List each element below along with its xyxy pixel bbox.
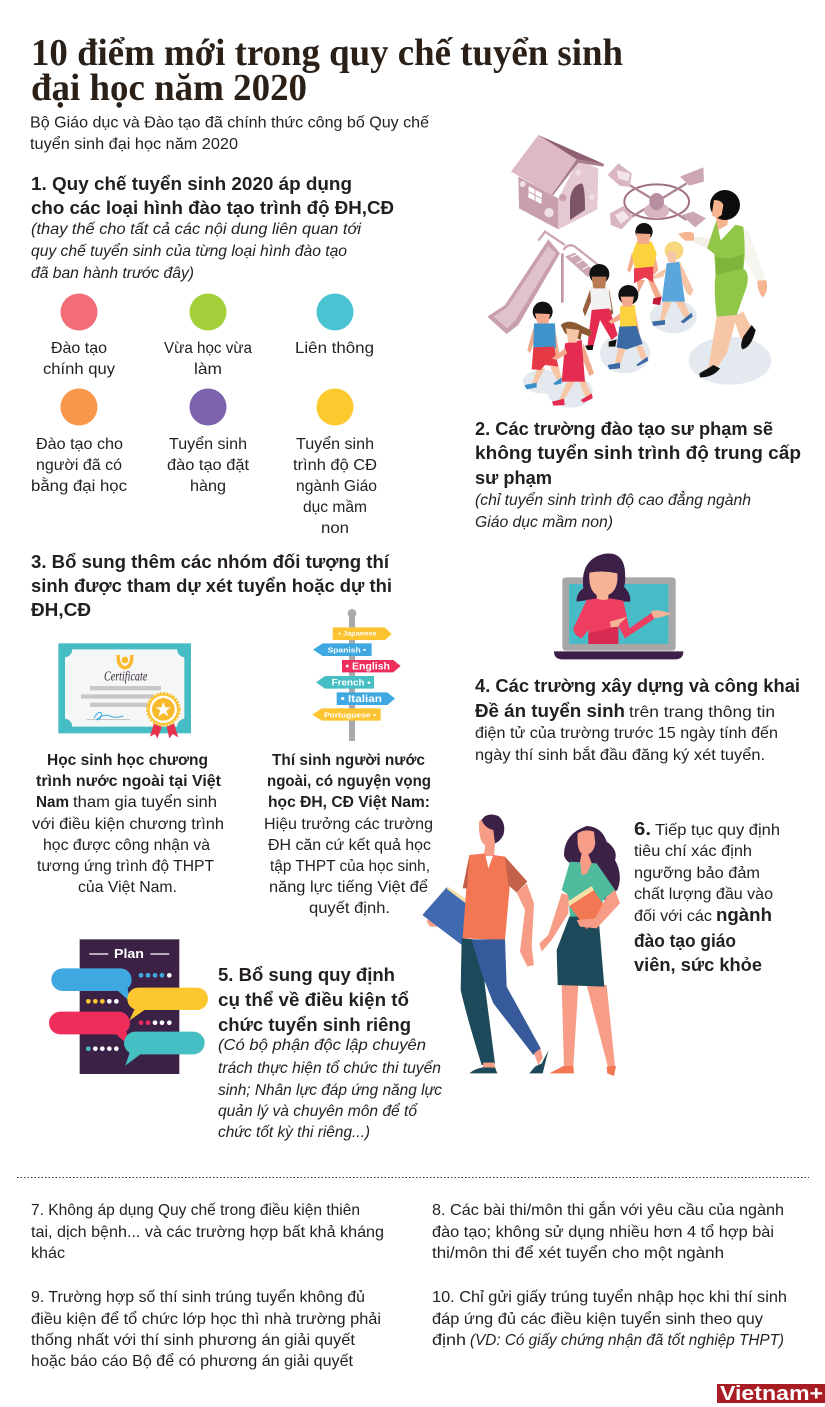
icon: language signpost: French • (332, 677, 371, 687)
text: foreign candidates: Hiệu trưởng các trường (264, 816, 433, 833)
text: foreign programme students: trình nước ngoài tại Việt (36, 773, 222, 790)
item: Đào tạo chính quy: Đào tạo (51, 340, 107, 357)
text: point 8: đào tạo; không sử dụng nhiều hơn 4 tổ hợp bài (432, 1223, 774, 1241)
child: yellow tank (615, 343, 647, 363)
teacher (708, 315, 737, 368)
text: point 9: điều kiện để tổ chức lớp học thì nhà trường phải (31, 1310, 381, 1328)
text: foreign programme students: Nam (36, 794, 69, 811)
number: 6: 6. (634, 819, 651, 839)
heading: point 3: sinh được tham dự xét tuyển hoặc dự thi (31, 576, 392, 596)
heading: point 2: sư phạm (475, 468, 552, 488)
note: point 5: trách thực hiện tổ chức thi tuyển (218, 1059, 441, 1077)
item: Đào tạo chính quy (43, 294, 115, 378)
text: foreign candidates: năng lực tiếng Việt để (269, 878, 428, 896)
text: point 10: 10. Chỉ gửi giấy trúng tuyển nhập học khi thí sinh (432, 1288, 787, 1306)
icon: kindergarten illustration (487, 135, 771, 408)
subtitle: Bộ Giáo dục và Đào tạo đã chính thức công bố Quy chế (30, 114, 429, 132)
body: point 4: điện tử của trường trước 15 ngày tính đến (475, 725, 778, 742)
body: point 4 (475, 701, 778, 764)
icon: teacher on laptop (554, 553, 683, 659)
item: Đào tạo cho người đã có bằng đại học (31, 388, 127, 495)
panel: point 6 (634, 819, 780, 975)
icon: certificate (58, 643, 191, 738)
note: point 2 (475, 490, 751, 531)
text: point 9: 9. Trường hợp số thí sinh trúng tuyển không đủ (31, 1288, 365, 1306)
text: foreign programme students: tham gia tuyển sinh (73, 793, 217, 811)
logo: Vietnam+: Vietnam+ (720, 1383, 823, 1405)
text: point 9: thống nhất với thí sinh phương án giải quyết (31, 1332, 356, 1349)
text: foreign programme students: tương ứng trình độ THPT (37, 858, 214, 875)
heading: point 3: ĐH,CĐ (31, 600, 91, 620)
text: foreign programme students: Học sinh học chương (47, 752, 208, 769)
text: point 10 (432, 1288, 787, 1349)
body: point 6: tiêu chí xác định (634, 843, 752, 860)
item: Tuyển sinh trình độ CĐ ngành Giáo dục mầm non: ngành Giáo (296, 478, 377, 495)
title: 10 điểm mới trong quy chế tuyển sinh (31, 32, 623, 74)
heading: point 4: 4. Các trường xây dựng và công khai (475, 676, 800, 696)
note: point 5: quản lý và chuyên môn để tổ (218, 1102, 418, 1120)
text: foreign programme students: với điều kiện chương trình (32, 816, 224, 833)
panel: point 5 (218, 965, 442, 1141)
note: point 5 (218, 1037, 442, 1141)
title: đại học năm 2020 (31, 67, 307, 109)
child: yellow shirt (637, 277, 662, 300)
note: point 2: Giáo dục mầm non) (475, 514, 613, 531)
note: point 1: (thay thế cho tất cả các nội dung liên quan tới (31, 221, 361, 238)
text: point 10: (VD: Có giấy chứng nhận đã tốt nghiệp THPT) (470, 1332, 784, 1349)
text: foreign candidates: Thí sinh người nước (272, 752, 425, 769)
item: Liên thông (295, 294, 374, 357)
body: point 6: ngưỡng bảo đảm (634, 865, 760, 882)
text: point 8: thi/môn thi để xét tuyển cho một ngành (432, 1244, 724, 1262)
note: point 2: (chỉ tuyển sinh trình độ cao đẳng ngành (475, 490, 751, 509)
text: point 8: 8. Các bài thi/môn thi gắn với yêu cầu của ngành (432, 1200, 784, 1219)
body: point 6: chất lượng đầu vào (634, 886, 773, 903)
body: point 6: viên, sức khỏe (634, 955, 762, 975)
heading: point 5: chức tuyển sinh riêng (218, 1015, 411, 1035)
icon: plan with speech bubbles: Plan (114, 946, 144, 961)
text: foreign programme students: học được công nhận và (43, 837, 210, 854)
item: Liên thông: Liên thông (295, 340, 374, 357)
item: Tuyển sinh trình độ CĐ ngành Giáo dục mầm non: trình độ CĐ (293, 457, 377, 474)
heading: point 3 (31, 552, 392, 620)
item: Vừa học vừa làm (164, 294, 252, 378)
icon: language signpost: Spanish • (328, 647, 367, 654)
text: point 7: 7. Không áp dụng Quy chế trong điều kiện thiên (31, 1202, 360, 1219)
child: red dress (558, 380, 592, 402)
item: Đào tạo chính quy: chính quy (43, 361, 115, 378)
text: point 9: hoặc báo cáo Bộ để có phương án giải quyết (31, 1352, 354, 1370)
text: point 7: khác (31, 1245, 65, 1262)
subtitle (30, 114, 429, 153)
body: point 4: ngày thí sinh bắt đầu đăng ký xét tuyển. (475, 745, 765, 764)
icon: language signpost: • English (345, 661, 390, 672)
text: point 10: đáp ứng đủ các điều kiện tuyển sinh theo quy (432, 1310, 763, 1328)
body: point 4: trên trang thông tin (629, 704, 775, 721)
item: Tuyển sinh đào tạo đặt hàng: Tuyển sinh (169, 435, 247, 453)
text: point 8 (432, 1200, 784, 1262)
body: point 6: đối với các (634, 908, 712, 925)
text: foreign programme students (32, 752, 224, 896)
icon: language signpost (312, 609, 401, 741)
text: point 7: tai, dịch bệnh... và các trường hợp bất khả kháng (31, 1224, 384, 1241)
icon: language signpost: • Japanese (338, 631, 377, 638)
note: point 5: sinh; Nhân lực đáp ứng năng lực (218, 1082, 442, 1099)
note: point 1 (31, 221, 361, 282)
body: point 6: ngành (716, 905, 772, 925)
heading: point 5: 5. Bổ sung quy định (218, 965, 395, 985)
item: Tuyển sinh đào tạo đặt hàng: đào tạo đặt (167, 457, 250, 474)
heading: point 5: cụ thể về điều kiện tổ (218, 990, 409, 1010)
text: point 9 (31, 1288, 381, 1370)
body: point 6: Tiếp tục quy định (655, 822, 780, 839)
text: foreign candidates: tập THPT của học sinh, (270, 858, 430, 875)
item: Vừa học vừa làm: làm (194, 361, 222, 378)
child: blue dress (660, 300, 690, 322)
item: Tuyển sinh trình độ CĐ ngành Giáo dục mầm non: non (321, 520, 349, 537)
text: foreign candidates: ngoài, có nguyện vọng (267, 773, 431, 790)
icon: language signpost: • Italian (341, 694, 382, 705)
icon: certificate: Certificate (104, 669, 147, 684)
item: Tuyển sinh trình độ CĐ ngành Giáo dục mầm non (293, 388, 377, 537)
text: point 10: định (432, 1332, 466, 1349)
heading: point 1: 1. Quy chế tuyển sinh 2020 áp dụng (31, 174, 352, 194)
heading: point 2: không tuyển sinh trình độ trung cấp (475, 443, 801, 463)
note: point 1: đã ban hành trước đây) (31, 265, 194, 282)
item: Tuyển sinh trình độ CĐ ngành Giáo dục mầm non: dục mầm (303, 499, 367, 516)
heading: point 2 (475, 419, 801, 488)
child: blue shirt (532, 365, 562, 385)
heading: point 1: cho các loại hình đào tạo trình độ ĐH,CĐ (31, 198, 394, 218)
icon: language signpost: Portuguese • (324, 710, 376, 719)
panel: section 1 training types (31, 174, 394, 537)
panel: point 4 (475, 676, 800, 764)
note: point 5: (Có bộ phận độc lập chuyên (218, 1037, 426, 1054)
body: point 6: đào tạo giáo (634, 931, 736, 951)
icon: plan with speech bubbles (49, 939, 208, 1074)
note: point 1: quy chế tuyển sinh của từng loại hình đào tạo (31, 242, 347, 260)
item: Tuyển sinh trình độ CĐ ngành Giáo dục mầm non: Tuyển sinh (296, 435, 374, 453)
heading: point 5 (218, 965, 411, 1035)
body: point 4: Đề án tuyển sinh (475, 701, 625, 721)
text: foreign candidates: quyết định. (309, 900, 390, 917)
heading: point 2: 2. Các trường đào tạo sư phạm sẽ (475, 419, 773, 439)
item: Đào tạo cho người đã có bằng đại học: Đào tạo cho (36, 436, 123, 453)
item: Tuyển sinh đào tạo đặt hàng: hàng (190, 478, 226, 495)
item: Đào tạo cho người đã có bằng đại học: bằng đại học (31, 476, 127, 495)
item: Đào tạo cho người đã có bằng đại học: người đã có (36, 457, 122, 474)
text: foreign candidates (264, 752, 433, 917)
heading: point 3: 3. Bổ sung thêm các nhóm đối tượng thí (31, 552, 390, 572)
item: Tuyển sinh đào tạo đặt hàng (167, 388, 250, 495)
icon: two students with books (422, 815, 620, 1076)
text: point 7 (31, 1202, 384, 1262)
title (31, 32, 623, 109)
text: foreign candidates: ĐH căn cứ kết quả học (268, 837, 431, 854)
panel: point 2 (475, 419, 801, 531)
body: point 6 (634, 822, 780, 975)
panel: point 3 (31, 552, 433, 917)
text: foreign programme students: của Việt Nam. (78, 879, 177, 896)
subtitle: tuyển sinh đại học năm 2020 (30, 135, 238, 153)
item: Vừa học vừa làm: Vừa học vừa (164, 340, 252, 357)
text: foreign candidates: học ĐH, CĐ Việt Nam: (268, 794, 430, 811)
child: white shirt (583, 290, 613, 317)
note: point 5: chức tốt kỳ thi riêng...) (218, 1124, 370, 1141)
heading: point 1 (31, 174, 394, 218)
